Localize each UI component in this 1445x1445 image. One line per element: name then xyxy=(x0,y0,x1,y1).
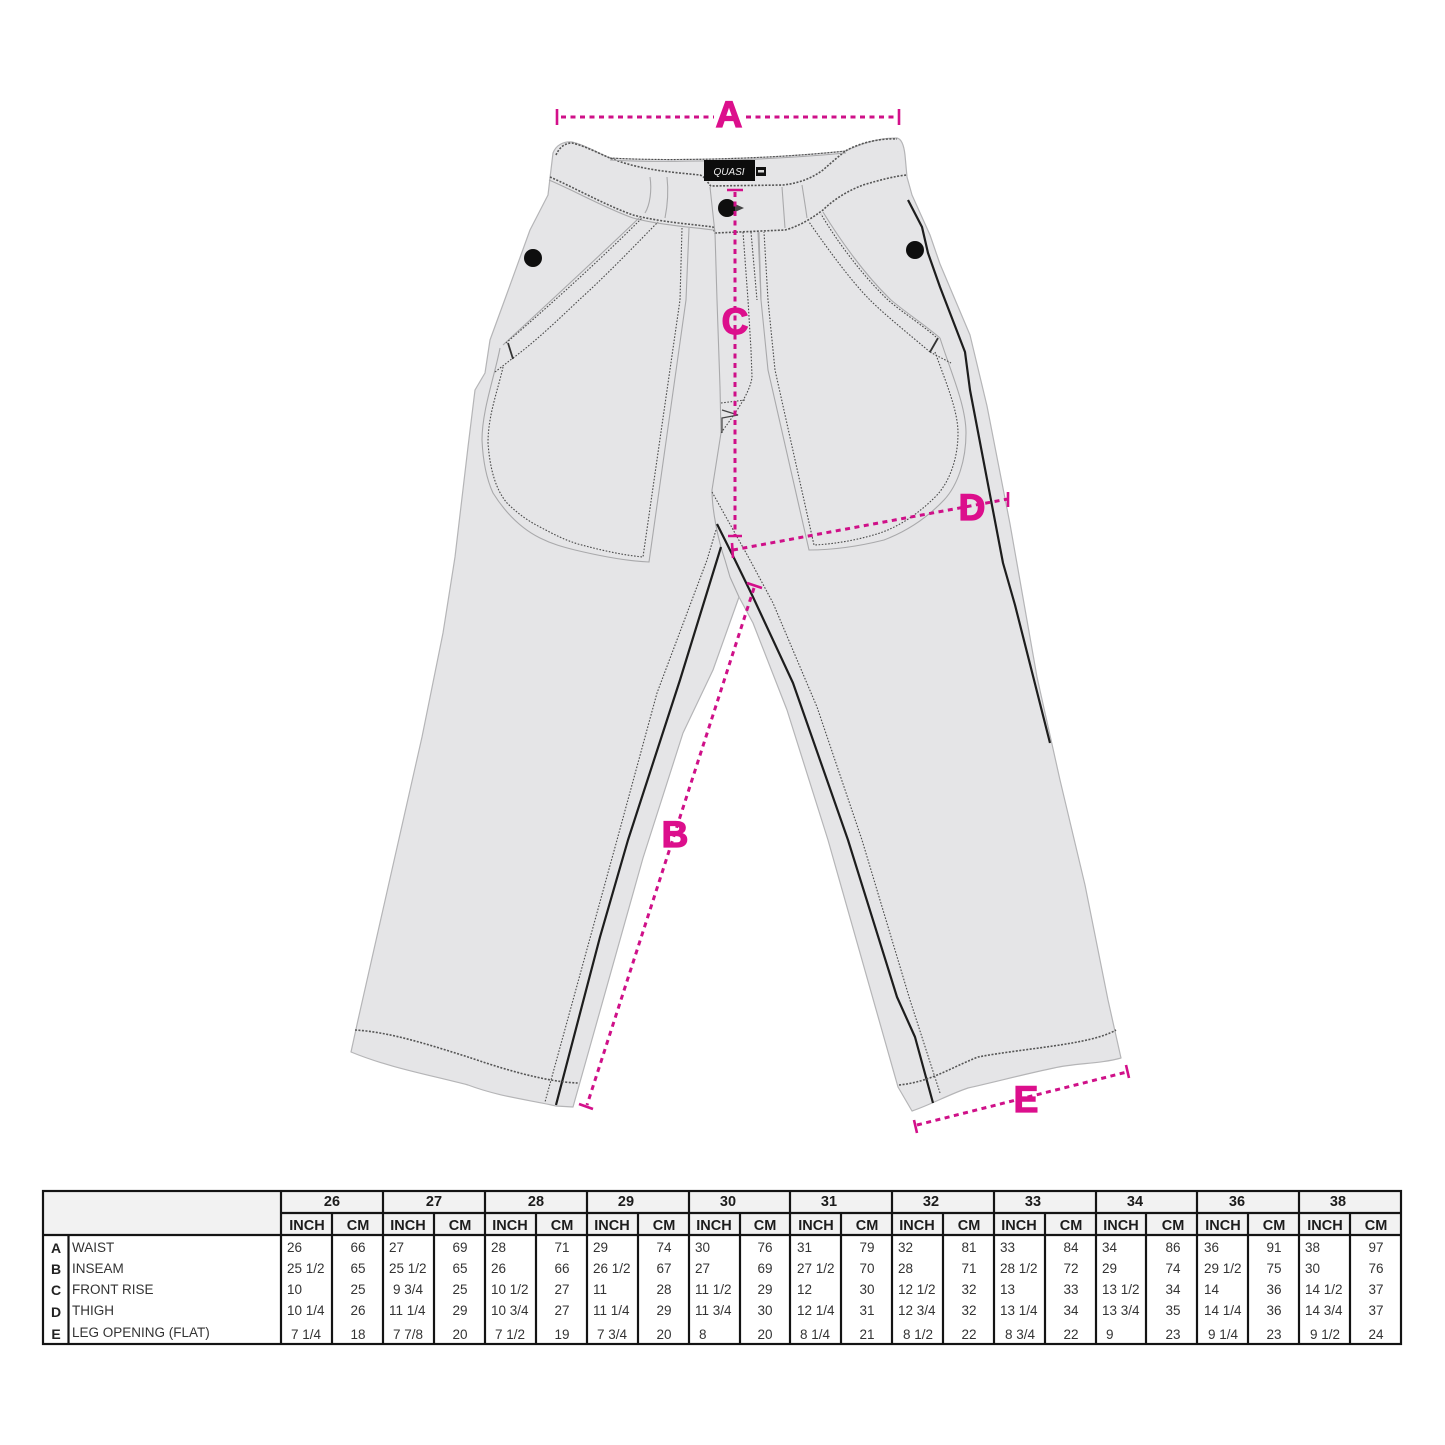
row A: waist: 36 xyxy=(1204,1240,1219,1255)
left pocket xyxy=(482,217,689,562)
row A: waist: 27 xyxy=(389,1240,404,1255)
size headings: 34 xyxy=(1127,1194,1143,1210)
row A: waist: 31 xyxy=(797,1240,812,1255)
row B: inseam: 25 1/2 xyxy=(287,1261,325,1276)
row E: leg opening: 21 xyxy=(859,1327,875,1342)
row D: thigh: 12 3/4 xyxy=(898,1303,936,1318)
row E: leg opening: 8 1/2 xyxy=(903,1327,933,1342)
row E: leg opening: 8 xyxy=(699,1327,707,1342)
row B: inseam: B xyxy=(51,1261,61,1277)
row D: thigh: 31 xyxy=(859,1303,875,1318)
row A: waist: 91 xyxy=(1266,1240,1282,1255)
unit headings: CM xyxy=(1162,1218,1184,1234)
row A: waist: 66 xyxy=(350,1240,366,1255)
row C: front rise: 33 xyxy=(1063,1282,1079,1297)
row B: inseam: 74 xyxy=(1165,1261,1181,1276)
row A: waist xyxy=(51,1240,1384,1256)
row C: front rise: 25 xyxy=(452,1282,468,1297)
measurement C: front rise: C xyxy=(722,301,748,342)
row C: front rise: 9 3/4 xyxy=(393,1282,424,1297)
black side and inseam lines xyxy=(556,200,1050,1105)
row D: thigh: 14 1/4 xyxy=(1204,1303,1242,1318)
row B: inseam: 72 xyxy=(1063,1261,1079,1276)
measurement D: thigh: D xyxy=(959,487,985,528)
row E: leg opening: 20 xyxy=(757,1327,773,1342)
row C: front rise: 37 xyxy=(1368,1282,1384,1297)
table grid xyxy=(43,1191,1401,1344)
row D: thigh: 27 xyxy=(554,1303,570,1318)
unit headings: INCH xyxy=(1205,1218,1241,1234)
row C: front rise: 11 xyxy=(593,1282,607,1297)
row B: inseam: 26 1/2 xyxy=(593,1261,631,1276)
row C: front rise: 32 xyxy=(961,1282,977,1297)
unit headings: CM xyxy=(653,1218,675,1234)
row D: thigh: 34 xyxy=(1063,1303,1079,1318)
size headings xyxy=(324,1194,1346,1210)
size headings: 32 xyxy=(923,1194,939,1210)
row B: inseam: 67 xyxy=(656,1261,672,1276)
size headings: 27 xyxy=(426,1194,442,1210)
front fly and rise seams xyxy=(712,232,940,1093)
row B: inseam: 25 1/2 xyxy=(389,1261,427,1276)
row A: waist: 30 xyxy=(695,1240,710,1255)
row B: inseam: 65 xyxy=(350,1261,366,1276)
row B: inseam: 66 xyxy=(554,1261,570,1276)
measurement D: thigh xyxy=(732,487,1008,558)
row B: inseam: 28 1/2 xyxy=(1000,1261,1038,1276)
row C: front rise: 12 1/2 xyxy=(898,1282,936,1297)
row D: thigh: 10 3/4 xyxy=(491,1303,529,1318)
row D: thigh: 36 xyxy=(1266,1303,1282,1318)
row B: inseam: 75 xyxy=(1266,1261,1282,1276)
row D: thigh: 29 xyxy=(656,1303,672,1318)
row D: thigh: 35 xyxy=(1165,1303,1181,1318)
row E: leg opening: 22 xyxy=(961,1327,977,1342)
right pocket xyxy=(758,212,966,550)
row E: leg opening: 22 xyxy=(1063,1327,1079,1342)
row E: leg opening: 19 xyxy=(554,1327,570,1342)
row D: thigh: 29 xyxy=(452,1303,468,1318)
row C: front rise: 25 xyxy=(350,1282,366,1297)
row B: inseam: 69 xyxy=(757,1261,773,1276)
row C: front rise: 12 xyxy=(797,1282,812,1297)
row E: leg opening: 7 1/2 xyxy=(495,1327,525,1342)
row D: thigh: 11 1/4 xyxy=(389,1303,426,1318)
row D: thigh xyxy=(51,1303,1384,1320)
row A: waist: 76 xyxy=(757,1240,773,1255)
row B: inseam: 28 xyxy=(898,1261,913,1276)
row B: inseam: 29 xyxy=(1102,1261,1117,1276)
unit headings xyxy=(289,1218,1387,1234)
size headings: 31 xyxy=(821,1194,837,1210)
row A: waist: A xyxy=(51,1240,61,1256)
measurement E: leg opening xyxy=(914,1065,1129,1133)
row A: waist: 26 xyxy=(287,1240,302,1255)
row D: thigh: 13 1/4 xyxy=(1000,1303,1038,1318)
row A: waist: 79 xyxy=(859,1240,875,1255)
unit headings: INCH xyxy=(899,1218,935,1234)
row A: waist: 33 xyxy=(1000,1240,1015,1255)
row C: front rise: FRONT RISE xyxy=(72,1282,154,1297)
row D: thigh: 30 xyxy=(757,1303,773,1318)
size headings: 33 xyxy=(1025,1194,1041,1210)
unit headings: CM xyxy=(754,1218,776,1234)
size headings: 28 xyxy=(528,1194,544,1210)
row B: inseam: 26 xyxy=(491,1261,506,1276)
row C: front rise: C xyxy=(51,1282,61,1298)
row E: leg opening: 23 xyxy=(1266,1327,1282,1342)
row E: leg opening: LEG OPENING (FLAT) xyxy=(72,1325,210,1340)
row D: thigh: 32 xyxy=(961,1303,977,1318)
row D: thigh: 11 3/4 xyxy=(695,1303,732,1318)
size headings: 26 xyxy=(324,1194,340,1210)
row A: waist: 29 xyxy=(593,1240,608,1255)
row E: leg opening: 20 xyxy=(656,1327,672,1342)
row A: waist: 38 xyxy=(1305,1240,1320,1255)
unit headings: INCH xyxy=(289,1218,325,1234)
row B: inseam: 30 xyxy=(1305,1261,1320,1276)
unit headings: INCH xyxy=(594,1218,630,1234)
size headings: 29 xyxy=(618,1194,634,1210)
unit headings: INCH xyxy=(492,1218,528,1234)
row B: inseam: INSEAM xyxy=(72,1261,124,1276)
row E: leg opening: 9 1/2 xyxy=(1310,1327,1340,1342)
row A: waist: 71 xyxy=(554,1240,570,1255)
row C: front rise: 13 1/2 xyxy=(1102,1282,1140,1297)
unit headings: INCH xyxy=(1001,1218,1037,1234)
waistband xyxy=(549,139,907,233)
size headings: 36 xyxy=(1229,1194,1245,1210)
row C: front rise: 36 xyxy=(1266,1282,1282,1297)
unit headings: CM xyxy=(347,1218,369,1234)
row C: front rise: 13 xyxy=(1000,1282,1015,1297)
row A: waist: 86 xyxy=(1165,1240,1181,1255)
row B: inseam: 27 xyxy=(695,1261,710,1276)
row B: inseam: 76 xyxy=(1368,1261,1384,1276)
row A: waist: WAIST xyxy=(72,1240,114,1255)
row E: leg opening: 8 1/4 xyxy=(800,1327,831,1342)
row A: waist: 69 xyxy=(452,1240,468,1255)
size headings: 38 xyxy=(1330,1194,1346,1210)
row E: leg opening: 7 3/4 xyxy=(597,1327,628,1342)
row B: inseam: 71 xyxy=(961,1261,977,1276)
brand label: QUASI xyxy=(713,167,745,178)
row D: thigh: 14 3/4 xyxy=(1305,1303,1343,1318)
row B: inseam: 65 xyxy=(452,1261,468,1276)
row E: leg opening: 20 xyxy=(452,1327,468,1342)
pants silhouette xyxy=(351,138,1121,1111)
row A: waist: 84 xyxy=(1063,1240,1079,1255)
unit headings: INCH xyxy=(696,1218,732,1234)
row A: waist: 81 xyxy=(961,1240,977,1255)
row C: front rise: 27 xyxy=(554,1282,570,1297)
unit headings: CM xyxy=(958,1218,980,1234)
row C: front rise: 10 xyxy=(287,1282,302,1297)
measurement A: waist: A xyxy=(716,94,742,135)
table header shading xyxy=(42,1191,1401,1235)
unit headings: INCH xyxy=(1307,1218,1343,1234)
row D: thigh: D xyxy=(51,1304,61,1320)
row A: waist: 32 xyxy=(898,1240,913,1255)
row D: thigh: 10 1/4 xyxy=(287,1303,325,1318)
row D: thigh: 37 xyxy=(1368,1303,1384,1318)
row C: front rise xyxy=(51,1282,1384,1298)
row A: waist: 28 xyxy=(491,1240,506,1255)
unit headings: CM xyxy=(1365,1218,1387,1234)
row B: inseam: 70 xyxy=(859,1261,875,1276)
measurement A: waist xyxy=(557,94,899,135)
pants technical drawing xyxy=(351,138,1121,1111)
row B: inseam: 27 1/2 xyxy=(797,1261,835,1276)
row E: leg opening: 7 7/8 xyxy=(393,1327,423,1342)
unit headings: CM xyxy=(551,1218,573,1234)
row E: leg opening xyxy=(51,1325,1384,1342)
row A: waist: 97 xyxy=(1368,1240,1384,1255)
unit headings: CM xyxy=(449,1218,471,1234)
row D: thigh: 11 1/4 xyxy=(593,1303,630,1318)
buttons xyxy=(524,199,924,267)
row B: inseam: 29 1/2 xyxy=(1204,1261,1242,1276)
row A: waist: 74 xyxy=(656,1240,672,1255)
row C: front rise: 10 1/2 xyxy=(491,1282,529,1297)
row E: leg opening: 9 1/4 xyxy=(1208,1327,1239,1342)
measurement B: inseam: B xyxy=(662,814,688,855)
unit headings: CM xyxy=(1263,1218,1285,1234)
brand label xyxy=(704,160,766,181)
row C: front rise: 14 1/2 xyxy=(1305,1282,1343,1297)
row A: waist: 34 xyxy=(1102,1240,1118,1255)
row C: front rise: 29 xyxy=(757,1282,773,1297)
row E: leg opening: 23 xyxy=(1165,1327,1181,1342)
size headings: 30 xyxy=(720,1194,736,1210)
row D: thigh: THIGH xyxy=(72,1303,114,1318)
row C: front rise: 30 xyxy=(859,1282,875,1297)
row E: leg opening: 24 xyxy=(1368,1327,1384,1342)
row E: leg opening: E xyxy=(51,1326,61,1342)
unit headings: CM xyxy=(1060,1218,1082,1234)
row C: front rise: 28 xyxy=(656,1282,672,1297)
row D: thigh: 26 xyxy=(350,1303,366,1318)
row B: inseam xyxy=(51,1261,1384,1277)
row C: front rise: 34 xyxy=(1165,1282,1181,1297)
measurement E: leg opening: E xyxy=(1014,1079,1038,1120)
measurement C: front rise xyxy=(722,190,748,536)
row C: front rise: 11 1/2 xyxy=(695,1282,732,1297)
unit headings: INCH xyxy=(1103,1218,1139,1234)
hem stitching xyxy=(355,1030,1116,1085)
row C: front rise: 14 xyxy=(1204,1282,1220,1297)
size table xyxy=(42,1191,1401,1344)
row D: thigh: 13 3/4 xyxy=(1102,1303,1140,1318)
row E: leg opening: 18 xyxy=(350,1327,366,1342)
unit headings: INCH xyxy=(390,1218,426,1234)
inner leg stitching xyxy=(545,530,716,1102)
measurement B: inseam xyxy=(579,583,762,1109)
unit headings: INCH xyxy=(798,1218,834,1234)
row E: leg opening: 7 1/4 xyxy=(291,1327,322,1342)
row E: leg opening: 9 xyxy=(1106,1327,1114,1342)
row D: thigh: 12 1/4 xyxy=(797,1303,835,1318)
unit headings: CM xyxy=(856,1218,878,1234)
row E: leg opening: 8 3/4 xyxy=(1005,1327,1036,1342)
